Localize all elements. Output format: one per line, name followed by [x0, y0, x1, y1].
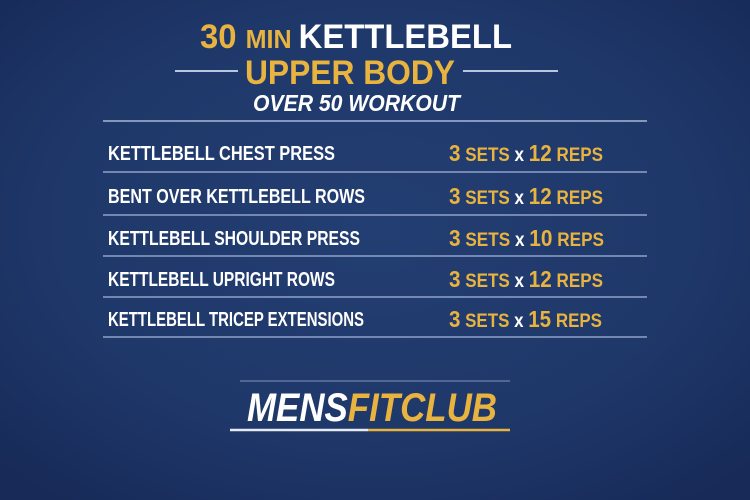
title line 1: 30 MIN KETTLEBELL [200, 18, 512, 56]
row 3 [108, 225, 604, 251]
title line 2: UPPER BODY [245, 54, 455, 92]
row 5 [108, 306, 602, 332]
table of exercises [103, 121, 647, 337]
row 3: KETTLEBELL SHOULDER PRESS [108, 228, 360, 250]
logo: MensFitClub: MENSFITCLUB [247, 386, 497, 430]
row 3: 3 SETS x 10 REPS [449, 225, 604, 251]
row 4: 3 SETS x 12 REPS [449, 266, 603, 292]
row 2 [108, 183, 603, 209]
row 1: KETTLEBELL CHEST PRESS [108, 143, 335, 165]
row 4 [108, 266, 603, 292]
subtitle: OVER 50 WORKOUT [253, 90, 462, 116]
row 1 [108, 140, 603, 166]
row 2: 3 SETS x 12 REPS [449, 183, 603, 209]
row 2: BENT OVER KETTLEBELL ROWS [108, 186, 365, 208]
row 5: 3 SETS x 15 REPS [449, 306, 602, 332]
row 5: KETTLEBELL TRICEP EXTENSIONS [108, 309, 364, 331]
title [175, 18, 558, 116]
row 1: 3 SETS x 12 REPS [449, 140, 603, 166]
row 4: KETTLEBELL UPRIGHT ROWS [108, 269, 335, 291]
